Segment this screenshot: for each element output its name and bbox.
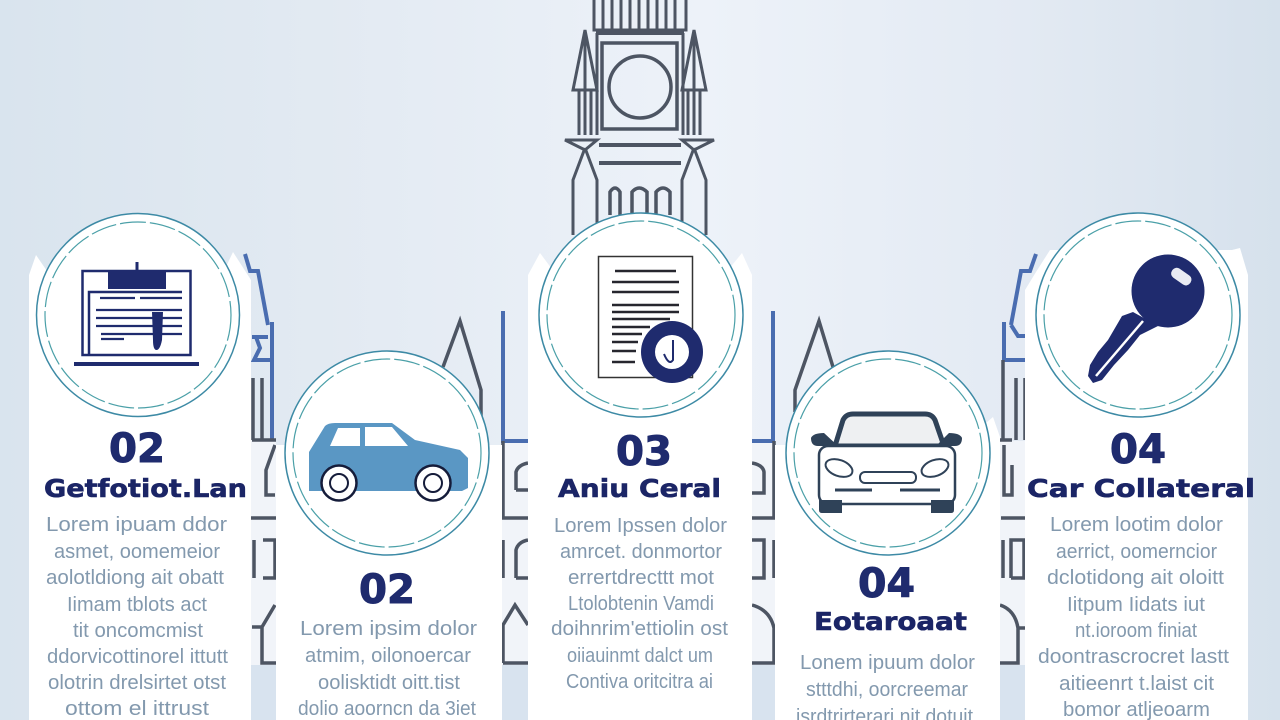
panel 5 body text: Iitpum Iidats iut [1067, 594, 1205, 616]
panel 4 body text: Lonem ipuum dolor [800, 652, 975, 674]
panel 5 body text: aerrict, oomerncior [1056, 541, 1217, 563]
strip: tower fragment between panels 2 and 3 [502, 311, 528, 720]
panel 3 body text: Lorem Ipssen dolor [554, 515, 727, 537]
panel 5 [1025, 213, 1255, 720]
spire behind circle 4 [795, 321, 833, 412]
panel 1 card [29, 252, 251, 720]
panel 3 body text: Ltolobtenin Vamdi [568, 593, 714, 615]
panel 5 body text [1038, 514, 1229, 720]
panel 2 body text: dolio aoorncn da 3iet [298, 698, 476, 720]
strip: tower fragment between panels 3 and 4 [752, 311, 775, 720]
panel 1 body text: Lorem ipuam ddor [46, 514, 227, 536]
panel 1 body text: ddorvicottinorel ittutt [47, 646, 228, 668]
panel 4 body text [796, 652, 975, 720]
panel 5 body text: doontrascrocret lastt [1038, 646, 1229, 668]
panel 1 heading: Getfotiot.Lan [44, 474, 247, 503]
panel 1 body text: tit oncomcmist [73, 620, 203, 642]
panel 5 number: 04 [1110, 427, 1166, 473]
panel 2 body text: Lorem ipsim dolor [300, 618, 477, 640]
panel 4 number: 04 [858, 561, 915, 607]
panel 3 body text: doihnrim'ettiolin ost [551, 618, 728, 640]
spire behind circle 2 [443, 321, 481, 420]
panel 5 badge [1036, 213, 1240, 417]
panel 1 [29, 214, 251, 720]
panel 3 body text: errertdrecttt mot [568, 567, 714, 589]
panel 3 body text: amrcet. donmortor [560, 541, 722, 563]
panel 4 card [775, 417, 1000, 720]
clock tower illustration [565, 0, 714, 235]
panel 4 [775, 351, 1000, 720]
panel 2 [276, 351, 502, 720]
icon: document with seal [598, 256, 703, 383]
panel 3 body text: oiiauinmt dalct um [567, 645, 713, 667]
panel 2 body text [298, 618, 477, 720]
panel 1 body text: aolotldiong ait obatt [46, 567, 224, 589]
panel 5 body text: dclotidong ait oloitt [1047, 567, 1224, 589]
panel 1 body text: asmet, oomemeior [54, 541, 220, 563]
panel 4 heading: Eotaroaat [814, 607, 967, 636]
panel 1 badge [36, 214, 240, 416]
panel 3 card [528, 253, 752, 720]
icon: car front view [811, 414, 962, 513]
strip: tower fragment between panels 4 and 5 [1000, 254, 1036, 720]
panel 3 number: 03 [616, 429, 672, 475]
panel 2 body text: oolisktidt oitt.tist [318, 672, 460, 694]
panel 5 card [1025, 248, 1248, 720]
panel 1 body text: Iimam tblots act [67, 594, 207, 616]
panel 2 card [276, 445, 502, 720]
panel 1 body text: olotrin drelsirtet otst [48, 672, 226, 694]
panel 5 body text: aitieenrt t.laist cit [1059, 673, 1214, 695]
strip: tower fragment between panels 1 and 2 [245, 254, 276, 720]
icon: clipboard document [74, 262, 199, 364]
panel 1 body text: ottom el ittrust [65, 698, 209, 720]
panel 2 body text: atmim, oilonoercar [305, 645, 471, 667]
panel 4 badge [786, 351, 990, 555]
panel 2 number: 02 [359, 567, 415, 613]
panel 3 body text: Contiva oritcitra ai [566, 671, 713, 693]
panel 1 body text [46, 514, 228, 720]
panel 3 body text [551, 515, 728, 693]
panel 5 body text: Lorem lootim dolor [1050, 514, 1223, 536]
panel 2 badge [285, 351, 489, 555]
panel 1 number: 02 [109, 426, 165, 472]
panel 5 body text: nt.ioroom finiat [1075, 620, 1197, 642]
panel 4 body text: stttdhi, oorcreemar [806, 679, 968, 701]
panel 3 [528, 213, 752, 720]
panel 3 badge [539, 213, 743, 417]
panel 5 heading: Car Collateral [1027, 474, 1255, 503]
icon: blue car side view [309, 423, 468, 500]
panel 3 heading: Aniu Ceral [558, 474, 721, 503]
icon: key [1088, 254, 1204, 383]
